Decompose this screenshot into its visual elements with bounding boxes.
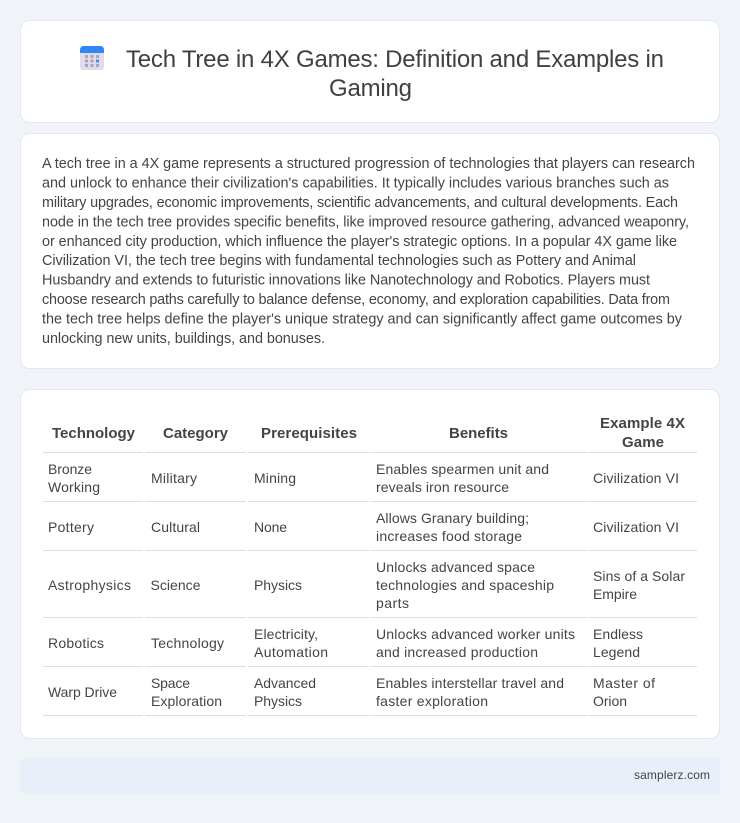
panel: technology table [20, 390, 720, 738]
table row: Robotics: Unlocks advanced worker units [376, 626, 575, 642]
table row: Robotics: Robotics [48, 635, 104, 651]
text block: tech tree description [42, 156, 695, 347]
text block: tech tree description: Civilization VI, the tech tree begins with fundamental technologies such as Pottery and Animal [42, 253, 636, 269]
table row: Astrophysics [48, 559, 685, 611]
table row: Bronze Working: Mining [254, 470, 296, 486]
table row: Pottery: Pottery [48, 519, 94, 535]
panel: title card [20, 20, 720, 122]
text block: tech tree description: Husbandry and extends to futuristic innovations like Nanotechnology and Robotics. Players must [42, 273, 650, 289]
title [126, 46, 664, 102]
text block: tech tree description: or enhanced city production, which influence the player's strategic options. In a popular 4X game like [42, 234, 677, 250]
table row: Astrophysics: Astrophysics [48, 577, 131, 593]
text block: tech tree description: military upgrades, economic improvements, scientific advancements, and cultural developments. Each [42, 195, 678, 211]
table row: Astrophysics: Empire [593, 586, 637, 602]
text block: tech tree description: A tech tree in a 4X game represents a structured progression of technologies that players can research [42, 156, 695, 172]
table header row: Benefits [449, 425, 508, 442]
table row: Robotics [48, 626, 643, 660]
table header row: Example 4X [600, 415, 685, 432]
table row: Warp Drive: Warp Drive [48, 684, 117, 700]
table row: Bronze Working: Working [48, 479, 100, 495]
table row: Pottery: Civilization VI [593, 519, 679, 535]
table row: Robotics: Electricity, [254, 626, 318, 642]
table row: Astrophysics: Physics [254, 577, 302, 593]
table row: Bronze Working: reveals iron resource [376, 479, 509, 495]
table row: Warp Drive: faster exploration [376, 693, 488, 709]
text block: tech tree description: unlocking new units, buildings, and bonuses. [42, 331, 325, 347]
table row: Astrophysics: parts [376, 595, 409, 611]
table row: Warp Drive: Physics [254, 693, 302, 709]
table row: Robotics: Endless [593, 626, 643, 642]
table row: Robotics: and increased production [376, 644, 538, 660]
table row: Astrophysics: Unlocks advanced space [376, 559, 535, 575]
table header row: Game [622, 434, 664, 451]
table row: Robotics: Technology [151, 635, 224, 651]
title: Tech Tree in 4X Games: Definition and Examples in [126, 46, 664, 73]
title: Gaming [329, 75, 412, 102]
footer bar [20, 759, 720, 793]
table row: Pottery: Allows Granary building; [376, 510, 529, 526]
table row: Bronze Working: Civilization VI [593, 470, 679, 486]
icon: calendar grid [80, 46, 104, 70]
table row: Warp Drive: Space [151, 675, 190, 691]
text block: tech tree description: node in the tech tree provides specific benefits, like improved resource gathering, advanced weaponry, [42, 214, 689, 230]
table header row: Category [163, 425, 229, 442]
table row: Pottery: None [254, 519, 287, 535]
table row: Warp Drive: Master of [593, 675, 655, 691]
table header row: Prerequisites [261, 425, 357, 442]
text block: tech tree description: choose research paths carefully to balance defense, economy, and exploration capabilities. Data from [42, 292, 670, 308]
table row: Astrophysics: Science [150, 577, 201, 593]
table row: Astrophysics: technologies and spaceship [376, 577, 554, 593]
table row: Bronze Working [48, 461, 679, 495]
table row: Warp Drive: Orion [593, 693, 627, 709]
table row: Robotics: Automation [254, 644, 328, 660]
table row: Warp Drive [48, 675, 655, 709]
table row: Warp Drive: Exploration [151, 693, 222, 709]
table row: Warp Drive: Enables interstellar travel and [376, 675, 564, 691]
table row: Bronze Working: Enables spearmen unit and [376, 461, 549, 477]
table row: Pottery [48, 510, 679, 544]
table row: Warp Drive: Advanced [254, 675, 316, 691]
table row: Robotics: Legend [593, 644, 640, 660]
table row: Bronze Working: Military [151, 470, 197, 486]
table row: Pottery: Cultural [151, 519, 200, 535]
table row: Bronze Working: Bronze [48, 461, 92, 477]
text block: tech tree description: and unlock to enhance their civilization's capabilities. It typically includes various branches such as [42, 175, 669, 191]
panel: description [20, 134, 720, 368]
table header row: Technology [52, 425, 136, 442]
table row: Astrophysics: Sins of a Solar [593, 568, 685, 584]
text block: tech tree description: the tech tree helps define the player's unique strategy and can significantly affect game outcomes by [42, 312, 683, 328]
table row: Pottery: increases food storage [376, 528, 522, 544]
footer source text: samplerz.com [634, 768, 710, 782]
table header row [52, 415, 685, 451]
